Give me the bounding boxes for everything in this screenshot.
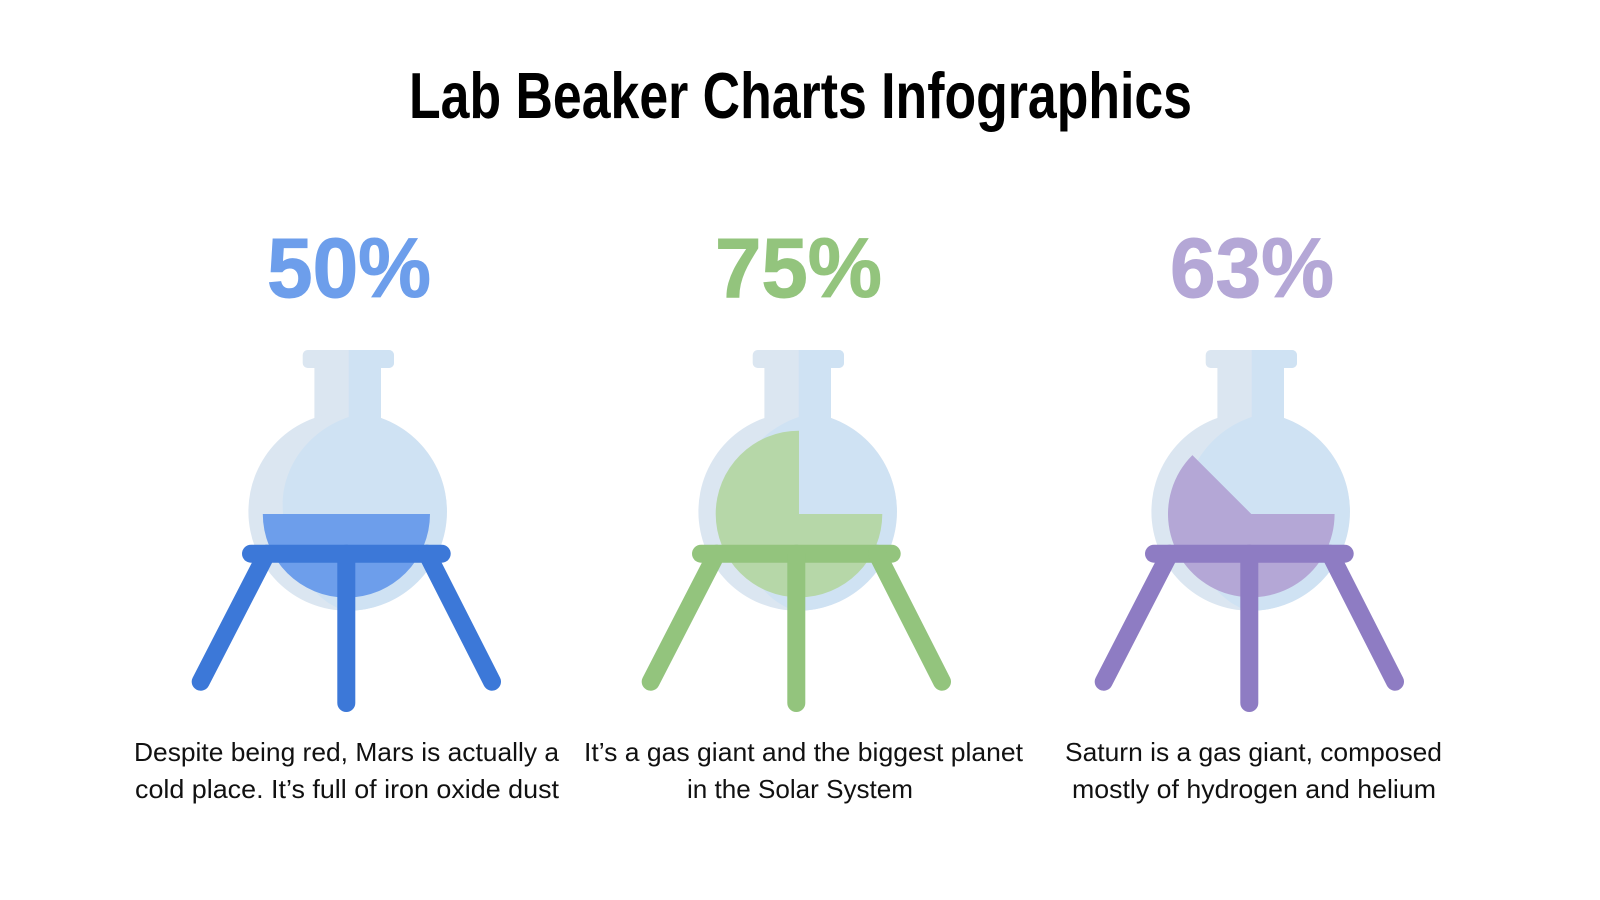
panel: Mars 50% [134,221,560,804]
icon: flask with 75% liquid on stand [651,350,942,703]
description: Despite being red, Mars is actually a [134,737,560,767]
description: mostly of hydrogen and helium [1072,774,1436,804]
stand [1104,554,1395,703]
description: cold place. It’s full of iron oxide dust [135,774,560,804]
title: Lab Beaker Charts Infographics [409,59,1192,132]
percentage: 75%: 75% [715,221,882,315]
panel: Saturn 63% [1065,221,1442,804]
percentage: 50%: 50% [267,221,431,315]
flask body [698,350,897,611]
icon: flask with 63% liquid on stand [1104,350,1395,703]
icon: flask with 50% liquid on stand [201,350,492,703]
flask body [1151,350,1350,611]
percentage: 63%: 63% [1170,221,1334,315]
stand [651,554,942,703]
liquid: 63% fill [1168,455,1335,597]
panel: Jupiter 75% [584,221,1024,804]
liquid: 75% fill [716,431,882,597]
description: Saturn is a gas giant, composed [1065,737,1442,767]
liquid: 50% fill [263,514,430,598]
description [1065,737,1442,804]
description [134,737,560,804]
description [584,737,1024,804]
stand [201,554,492,703]
flask body [248,350,447,611]
description: It’s a gas giant and the biggest planet [584,737,1024,767]
description: in the Solar System [687,774,913,804]
